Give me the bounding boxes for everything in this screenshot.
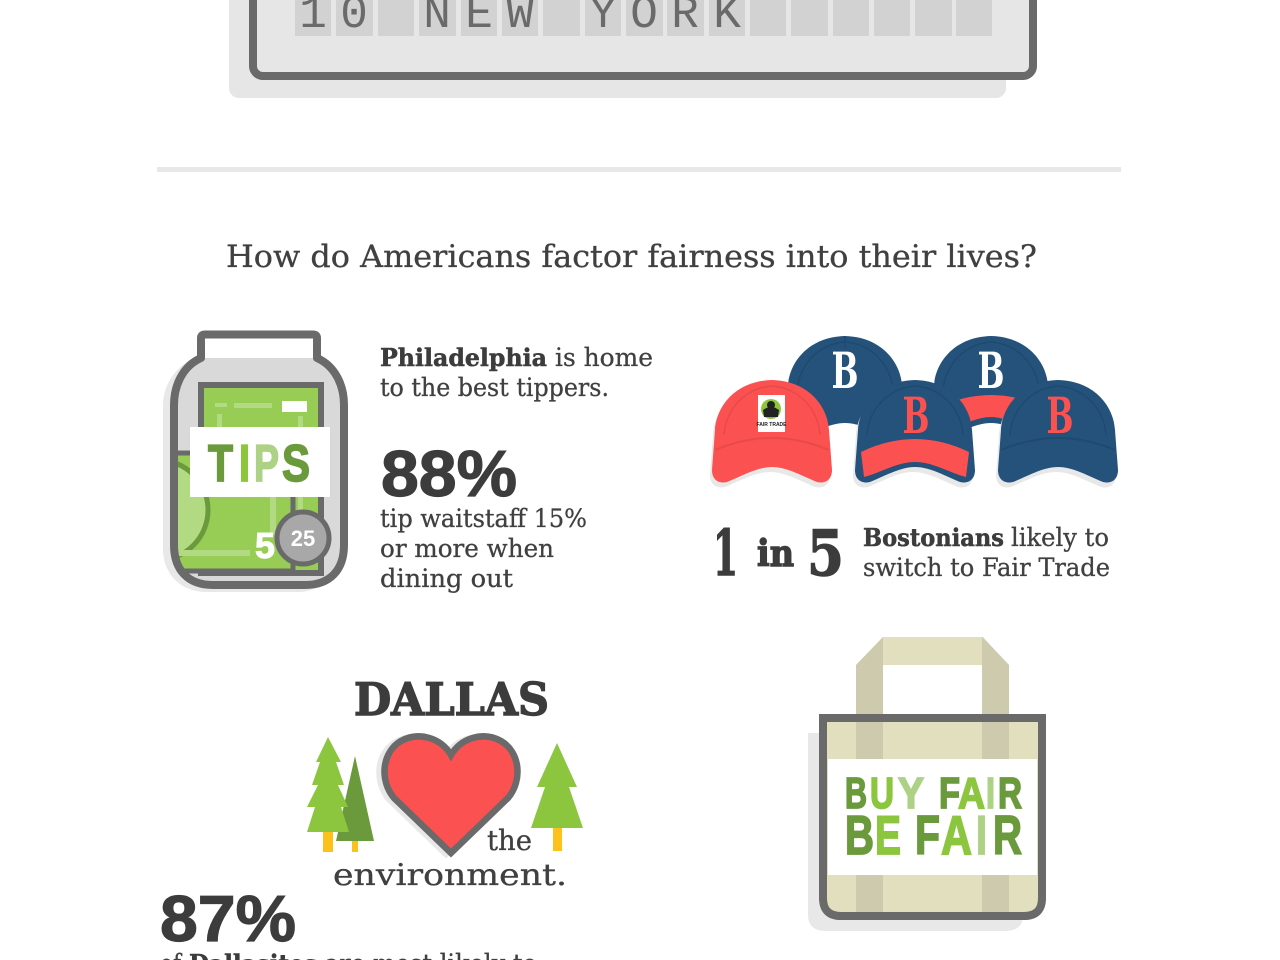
banknote value: 5 xyxy=(255,525,275,566)
icon: coin xyxy=(277,512,329,564)
bag shadow xyxy=(808,733,1023,931)
heading: Dallas: DALLAS xyxy=(354,673,549,726)
icon: navy hat back left: B xyxy=(832,341,858,400)
stat: 1 in 5: 1 xyxy=(713,516,738,590)
icon: coin: 25 xyxy=(291,526,315,551)
text: Bostonians xyxy=(863,523,1110,582)
label: tips: I xyxy=(239,435,250,493)
text: tip waitstaff: dining out xyxy=(380,564,513,593)
panel: Philadelphia tips xyxy=(108,334,653,593)
icon: heart xyxy=(379,736,518,854)
text: best tippers: is home xyxy=(555,343,653,372)
panel: departures board xyxy=(229,0,1033,98)
text: best tippers xyxy=(380,343,653,402)
stat: 88 percent: 88% xyxy=(381,437,517,510)
icon: navy hat back left xyxy=(785,336,905,438)
icon: right tree xyxy=(531,743,583,851)
icon: navy hat front right xyxy=(996,380,1118,488)
bag slogan: A xyxy=(958,769,985,818)
bag slogan: E xyxy=(875,804,901,866)
bag handles xyxy=(856,637,1009,716)
text: Bostonians: switch to Fair Trade xyxy=(863,553,1110,582)
bag body xyxy=(823,718,1042,916)
stat: 1 in 5: in xyxy=(757,533,794,575)
icon: light tree xyxy=(307,737,349,852)
bag slogan: I xyxy=(976,804,987,866)
bag slogan: B xyxy=(845,804,874,866)
bag slogan: R xyxy=(993,804,1022,866)
bag slogan: U xyxy=(870,769,894,818)
text: the environment: the xyxy=(487,824,532,857)
icon: red fair trade hat xyxy=(710,380,832,488)
text: the environment xyxy=(333,824,567,893)
panel: Boston hats xyxy=(710,336,1118,590)
text: tip waitstaff xyxy=(380,504,587,593)
icon: navy hat back right with red brim: B xyxy=(978,341,1004,400)
icon: navy hat front right: B xyxy=(1046,386,1074,445)
bag slogan: R xyxy=(998,769,1022,818)
bag slogan: F xyxy=(939,769,960,818)
text: best tippers: Philadelphia xyxy=(380,343,547,372)
text: tip waitstaff: tip waitstaff 15% xyxy=(380,504,587,533)
label: tips: T xyxy=(208,435,233,493)
stat: 1 in 5 xyxy=(713,516,844,590)
label: tips xyxy=(190,427,330,497)
text: Bostonians: Bostonians xyxy=(863,523,1004,552)
stat: 87 percent: 87% xyxy=(160,882,296,955)
infographic canvas xyxy=(157,0,1121,960)
bag slogan xyxy=(845,769,1022,866)
icon: tip jar xyxy=(163,330,348,592)
icon: navy hat with red brim: B xyxy=(902,386,930,445)
icon: red fair trade hat: FAIR TRADE xyxy=(756,422,787,428)
bag slogan: F xyxy=(915,804,940,866)
label: tips: P xyxy=(254,435,279,493)
text: best tippers: to the best tippers. xyxy=(380,373,609,402)
icon: navy hat with red brim xyxy=(853,380,975,488)
text: the environment: environment. xyxy=(333,858,567,893)
bag slogan: Y xyxy=(898,769,924,818)
bag slogan: B xyxy=(845,769,867,818)
panel: tote bag xyxy=(808,637,1042,931)
stat: 1 in 5: 5 xyxy=(807,516,844,590)
bag slogan: I xyxy=(986,769,995,818)
text: Dallasites xyxy=(160,949,537,960)
icon: dark tree xyxy=(336,756,374,852)
panel: Dallas environment xyxy=(160,673,583,960)
bag slogan: A xyxy=(941,804,972,866)
text: Bostonians: likely to xyxy=(1011,523,1109,552)
text: tip waitstaff: or more when xyxy=(380,534,554,563)
heading: How do Americans factor fairness into their lives? xyxy=(226,239,1037,275)
icon: navy hat back right with red brim xyxy=(931,336,1051,438)
label: tips: S xyxy=(282,435,310,493)
